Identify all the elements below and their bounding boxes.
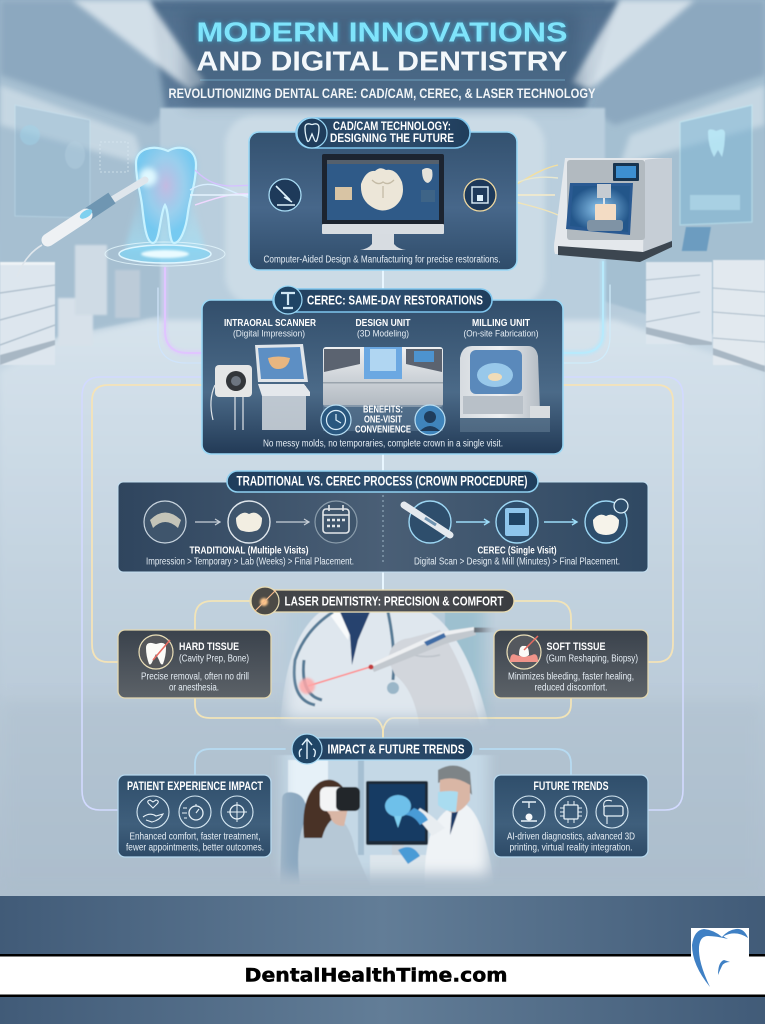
title line 2: AND DIGITAL DENTISTRY [196, 46, 568, 76]
step: digital scanner [404, 501, 451, 543]
icon: VR headset [596, 796, 628, 828]
icon: 3D printer [513, 796, 545, 828]
CEREC description: Digital Scan > Design & Mill (Minutes) > Final Placement. [414, 556, 620, 568]
title [168, 12, 596, 104]
panel description: printing, virtual reality integration. [510, 842, 632, 854]
benefits label: CONVENIENCE [355, 424, 411, 436]
panel: CAD/CAM technology [249, 132, 517, 270]
benefits label: BENEFITS: [363, 404, 403, 416]
icon: AI chip [555, 796, 587, 828]
icon: tooth [297, 118, 327, 148]
title: MODERN INNOVATIONS [196, 16, 568, 48]
label: on-site fabrication: (On-site Fabrication) [464, 328, 538, 340]
photo: dentist with laser pen [282, 612, 494, 724]
icon: target [221, 796, 253, 828]
traditional description: Impression > Temporary > Lab (Weeks) > Final Placement. [146, 556, 354, 568]
step: calendar [315, 501, 357, 543]
panel heading: PATIENT EXPERIENCE IMPACT [127, 781, 263, 793]
arrow [456, 519, 489, 525]
floor [0, 320, 765, 896]
heading text: IMPACT & FUTURE TRENDS [328, 742, 465, 756]
panel description [126, 832, 264, 854]
panel description: Enhanced comfort, faster treatment, [130, 832, 260, 842]
soft tissue description [508, 672, 634, 694]
icon: CAD tool circle [269, 179, 301, 211]
benefits label: ONE-VISIT [364, 414, 402, 426]
right wall screen [680, 105, 752, 225]
step: temporary crown [228, 501, 270, 543]
panel heading: FUTURE TRENDS [534, 781, 609, 793]
heading text: CEREC: SAME-DAY RESTORATIONS [307, 292, 483, 308]
title line 1: MODERN INNOVATIONS [196, 16, 568, 48]
panel: soft tissue [494, 630, 648, 698]
step: final crown [585, 499, 628, 543]
heading text: LASER DENTISTRY: PRECISION & COMFORT [284, 594, 504, 608]
panel: CEREC same-day restorations [202, 300, 563, 454]
badge: impact and future trends heading [292, 734, 473, 764]
icon: clock [321, 405, 351, 435]
label: milling unit: MILLING UNIT [472, 317, 530, 329]
soft tissue description: reduced discomfort. [534, 682, 608, 694]
illustration: holographic tooth and scanner [17, 142, 225, 277]
icon: CEREC scanner [274, 286, 302, 314]
icon: laser on tooth [139, 635, 173, 669]
CEREC label: CEREC (Single Visit) [478, 546, 556, 556]
illustration: milling unit [460, 346, 550, 432]
benefits label [355, 404, 411, 436]
panel: traditional vs CEREC process [118, 482, 648, 572]
badge: traditional vs CEREC heading [227, 471, 538, 492]
arrow [544, 519, 577, 525]
heading text: TRADITIONAL VS. CEREC PROCESS (CROWN PROCEDURE) [236, 474, 528, 488]
label: digital impression: (Digital Impression) [233, 328, 305, 340]
website banner [0, 954, 765, 997]
icon: laser on gum [507, 635, 541, 669]
label: design unit: DESIGN UNIT [356, 317, 411, 329]
hard tissue heading: HARD TISSUE [179, 641, 239, 653]
website name: DentalHealthTime.com [244, 964, 508, 986]
caption: Computer-Aided Design & Manufacturing for precise restorations. [264, 254, 500, 266]
step: design and mill [496, 501, 538, 543]
label: intraoral scanner: INTRAORAL SCANNER [224, 317, 316, 329]
badge: CEREC heading [273, 286, 492, 314]
subtitle: REVOLUTIONIZING DENTAL CARE: CAD/CAM, CEREC, & LASER TECHNOLOGY [168, 85, 596, 101]
hard tissue description [141, 672, 249, 694]
right furniture [646, 227, 765, 372]
left furniture [0, 262, 55, 365]
hard tissue description: Precise removal, often no drill [141, 672, 249, 682]
panel description: AI-driven diagnostics, advanced 3D [507, 832, 635, 842]
arrow [276, 519, 309, 525]
label: 3D modeling: (3D Modeling) [357, 328, 409, 340]
illustration: intraoral scanner [211, 344, 310, 430]
panel description [507, 832, 635, 854]
left wall screen [15, 105, 90, 218]
traditional label: TRADITIONAL (Multiple Visits) [190, 546, 308, 556]
icon: upward arrows [292, 734, 322, 764]
panel: hard tissue [118, 630, 271, 698]
heading line 1: CAD/CAM TECHNOLOGY: [333, 121, 451, 133]
step: impression tray [144, 501, 186, 543]
panel description: fewer appointments, better outcomes. [126, 842, 264, 854]
soft tissue subheading: (Gum Reshaping, Biopsy) [546, 654, 638, 664]
hard tissue subheading: (Cavity Prep, Bone) [179, 654, 249, 664]
icon: patient face [415, 405, 445, 435]
arrow [195, 519, 220, 525]
icon: milling circle [464, 179, 496, 211]
hard tissue description: or anesthesia. [169, 682, 219, 694]
soft tissue description: Minimizes bleeding, faster healing, [508, 672, 634, 682]
panel: future trends [494, 775, 648, 857]
badge: CAD/CAM heading [296, 118, 470, 148]
logo: tooth [691, 928, 749, 987]
icon: laser spark [251, 587, 279, 615]
badge: laser dentistry heading [250, 587, 514, 615]
connector lines [82, 262, 683, 810]
icon: caring hand [137, 796, 169, 828]
illustration: computer monitor with crown [322, 154, 444, 250]
photo: patient with VR headset and dentist [279, 755, 492, 882]
heading line 2: DESIGNING THE FUTURE [330, 133, 454, 145]
soft tissue heading: SOFT TISSUE [546, 641, 606, 653]
panel: patient experience impact [118, 775, 271, 857]
icon: stopwatch [179, 796, 211, 828]
divider [382, 490, 384, 565]
energy streams to panel [190, 165, 558, 215]
illustration: design unit [323, 347, 443, 431]
illustration: milling machine [554, 158, 672, 262]
caption: No messy molds, no temporaries, complete crown in a single visit. [263, 438, 503, 450]
left background chair [58, 245, 140, 346]
footer band [0, 896, 765, 1024]
